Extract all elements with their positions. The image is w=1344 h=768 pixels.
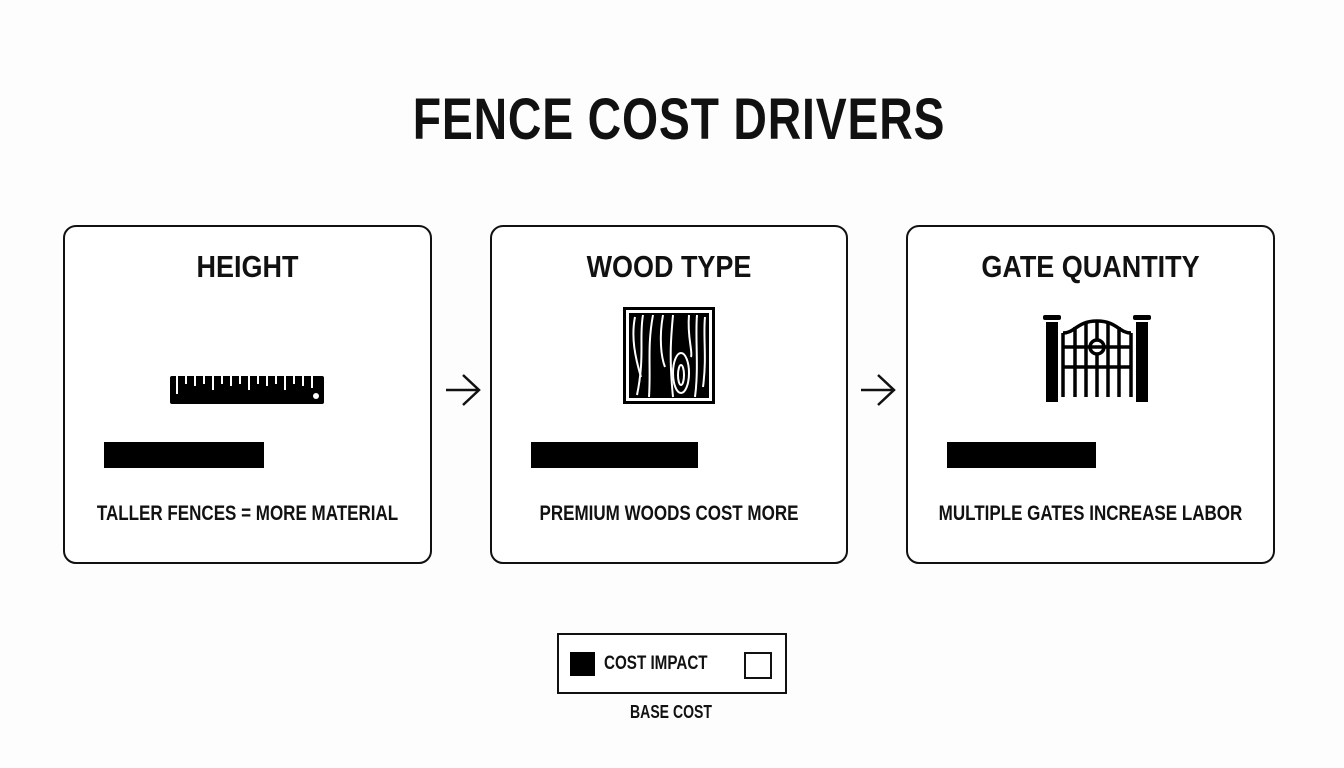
icon: gate: [1043, 315, 1151, 402]
legend swatch: cost impact: [570, 652, 595, 676]
cost bar: [947, 442, 1096, 468]
caption: MULTIPLE GATES INCREASE LABOR: [939, 502, 1242, 525]
legend label: cost impact: COST IMPACT: [604, 653, 708, 674]
legend swatch: base cost: [744, 652, 772, 679]
panel: wood type: [490, 225, 848, 564]
title: FENCE COST DRIVERS: [413, 87, 945, 152]
arrow 1: [446, 374, 481, 406]
icon: wood grain: [623, 307, 715, 404]
caption: PREMIUM WOODS COST MORE: [540, 502, 798, 525]
cost bar: [104, 442, 264, 468]
legend: [557, 633, 787, 694]
cost bar: [531, 442, 698, 468]
arrow 2: [861, 374, 896, 406]
icon: ruler: [170, 376, 324, 404]
panel: height: [63, 225, 432, 564]
panel: gate quantity: [906, 225, 1275, 564]
legend label: base cost: BASE COST: [630, 702, 712, 722]
heading: height: HEIGHT: [197, 249, 298, 284]
caption: TALLER FENCES = MORE MATERIAL: [97, 502, 398, 525]
heading: wood type: WOOD TYPE: [587, 249, 751, 284]
heading: gate quantity: GATE QUANTITY: [981, 249, 1200, 284]
